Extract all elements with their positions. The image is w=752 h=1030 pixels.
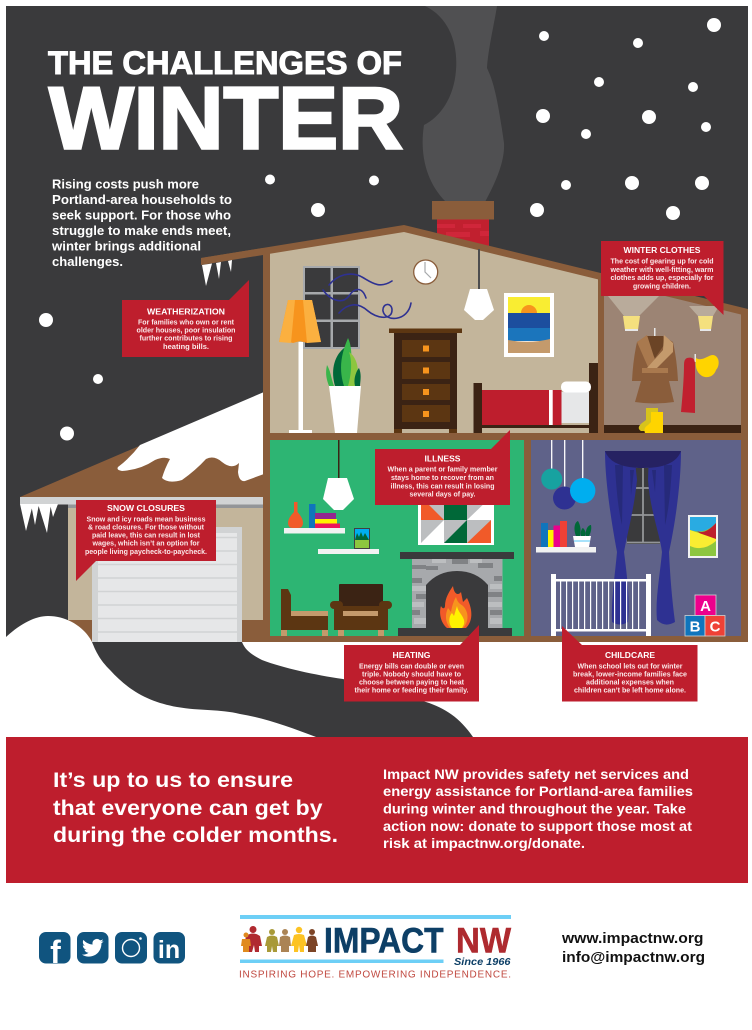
hanging mobile <box>541 440 595 510</box>
snow on garage roof <box>118 392 264 482</box>
callout: childcare: break, lower-income families face <box>573 670 687 678</box>
icon: linkedin: in <box>158 936 180 964</box>
callout: winter clothes: The cost of gearing up for cold <box>610 256 714 266</box>
Impact NW logo: IMPACT <box>324 922 444 960</box>
intro text <box>51 176 232 269</box>
callout: weatherization: further contributes to rising <box>140 334 232 342</box>
Impact NW logo: Since 1966 <box>454 957 511 968</box>
banner headline: It’s up to us to ensure <box>53 768 293 792</box>
snow mound <box>6 616 92 660</box>
shelf with vase and books <box>284 502 345 534</box>
callout: snow closures: SNOW CLOSURES <box>107 503 185 513</box>
callout: winter clothes: growing children. <box>633 282 691 290</box>
purple nursery <box>531 440 741 636</box>
icon: facebook <box>39 932 70 970</box>
callout: snow closures <box>76 500 216 581</box>
callout: weatherization <box>122 280 249 357</box>
callout: snow closures: Snow and icy roads mean business <box>86 514 206 524</box>
night sky background <box>6 6 748 642</box>
callout: childcare <box>562 626 698 702</box>
main house shell <box>201 225 748 642</box>
banner body: during winter and throughout the year. Take <box>383 800 686 816</box>
callout: weatherization: older houses, poor insulation <box>136 326 236 334</box>
callout: heating: their home or feeding their family. <box>354 686 468 694</box>
intro text: challenges. <box>52 254 123 269</box>
callout: heating <box>344 625 479 702</box>
chimney <box>432 201 494 255</box>
banner body: energy assistance for Portland-area families <box>383 783 693 799</box>
alphabet blocks <box>685 595 725 636</box>
logo figures <box>241 926 318 952</box>
nursery shelf <box>536 521 596 552</box>
geometric art <box>418 497 494 545</box>
fire <box>440 586 471 628</box>
drafts of wind <box>323 274 411 318</box>
curtains <box>605 451 681 625</box>
callout: illness: When a parent or family member <box>388 464 498 474</box>
icicles on main roof <box>202 260 232 286</box>
intro text: Portland-area households to <box>52 192 232 207</box>
callout: winter clothes: WINTER CLOTHES <box>624 245 701 255</box>
snowflakes <box>39 18 721 440</box>
icon: linkedin <box>154 932 185 964</box>
ceiling lights <box>608 296 719 331</box>
callout: childcare: CHILDCARE <box>605 650 655 660</box>
banner body <box>383 766 693 851</box>
wall picture <box>688 515 718 558</box>
banner headline: that everyone can get by <box>53 796 323 820</box>
icon: instagram <box>115 932 147 964</box>
social icons <box>39 932 185 970</box>
icon: facebook: f <box>50 934 61 970</box>
bed <box>474 363 598 433</box>
callout: snow closures: people living paycheck-to-paycheck. <box>85 547 207 556</box>
crib <box>551 574 651 636</box>
intro text: struggle to make ends meet, <box>52 223 231 238</box>
contact details: www.impactnw.org <box>561 931 704 947</box>
Impact NW logo <box>239 915 511 980</box>
callout: winter clothes: weather with well-fitting, warm <box>610 265 714 274</box>
road <box>92 642 473 737</box>
callout: heating: HEATING <box>392 650 431 660</box>
callout: illness: ILLNESS <box>424 454 461 464</box>
Impact NW logo: INSPIRING HOPE. EMPOWERING INDEPENDENCE. <box>239 970 511 980</box>
callout: childcare: additional expenses when <box>586 678 674 686</box>
callout: winter clothes <box>601 241 724 315</box>
upper room: bedroom <box>270 232 598 433</box>
Impact NW logo: NW <box>456 922 511 960</box>
intro text: Rising costs push more <box>52 176 199 192</box>
armchair <box>330 584 392 636</box>
floor lamp <box>279 300 321 433</box>
pendant lamp <box>323 440 354 510</box>
banner body: action now: donate to support those most at <box>383 818 692 834</box>
title: THE CHALLENGES OF <box>48 45 402 81</box>
window <box>303 266 360 349</box>
callout: illness <box>375 430 510 505</box>
sunset picture <box>504 293 554 357</box>
callout: childcare: When school lets out for winter <box>578 662 683 670</box>
callout: snow closures: wages, which isn’t an option for <box>92 538 200 548</box>
callout: illness: illness, this can result in losing <box>390 482 494 490</box>
pendant lamp <box>464 249 494 320</box>
garage door <box>92 527 242 642</box>
icon: twitter <box>77 932 108 964</box>
callout: weatherization: For families who own or rent <box>138 318 235 326</box>
callout: snow closures: paid leave, this can result in lost <box>92 530 201 540</box>
scarf <box>681 354 696 413</box>
icicles <box>20 504 58 533</box>
call-to-action banner <box>6 737 748 883</box>
clock <box>414 260 438 284</box>
potted plant <box>326 338 361 433</box>
callout: heating: triple. Nobody should have to <box>362 670 462 678</box>
garage roof <box>20 393 263 500</box>
callout: weatherization: heating bills. <box>163 342 209 351</box>
callout: weatherization: WEATHERIZATION <box>147 306 225 316</box>
snow ground <box>6 642 748 737</box>
side chair <box>281 589 328 636</box>
callout: snow closures: & road closures. For those without <box>88 522 205 532</box>
banner body: Impact NW provides safety net services and <box>383 766 689 782</box>
intro text: winter brings additional <box>51 238 201 254</box>
hat <box>696 355 719 377</box>
alphabet blocks: C <box>710 618 721 636</box>
banner headline <box>53 768 338 847</box>
shelf <box>604 425 741 433</box>
callout: heating: choose between paying to heat <box>359 678 465 686</box>
coat <box>632 328 678 404</box>
alphabet blocks: B <box>690 618 701 636</box>
callout: heating: Energy bills can double or even <box>359 662 464 670</box>
title: WINTER <box>49 68 403 168</box>
intro text: seek support. For those who <box>52 208 231 222</box>
shelf with small picture <box>318 528 379 554</box>
dresser <box>389 328 462 433</box>
callout: illness: stays home to recover from an <box>391 473 494 482</box>
banner headline: during the colder months. <box>53 823 338 847</box>
alphabet blocks: A <box>700 598 711 615</box>
callout: illness: several days of pay. <box>410 490 476 498</box>
contact details <box>561 931 705 966</box>
callout: winter clothes: clothes adds up, especially for <box>610 273 714 282</box>
window <box>627 468 660 544</box>
boots <box>639 408 663 433</box>
green living room <box>270 440 524 636</box>
banner body: risk at impactnw.org/donate. <box>383 835 585 851</box>
garage <box>20 497 263 642</box>
upper right room: winter clothes <box>604 281 741 433</box>
callout: childcare: children can’t be left home alone. <box>574 686 686 694</box>
smoke from chimney <box>423 6 504 202</box>
fireplace <box>398 552 514 636</box>
contact details: info@impactnw.org <box>562 950 705 966</box>
